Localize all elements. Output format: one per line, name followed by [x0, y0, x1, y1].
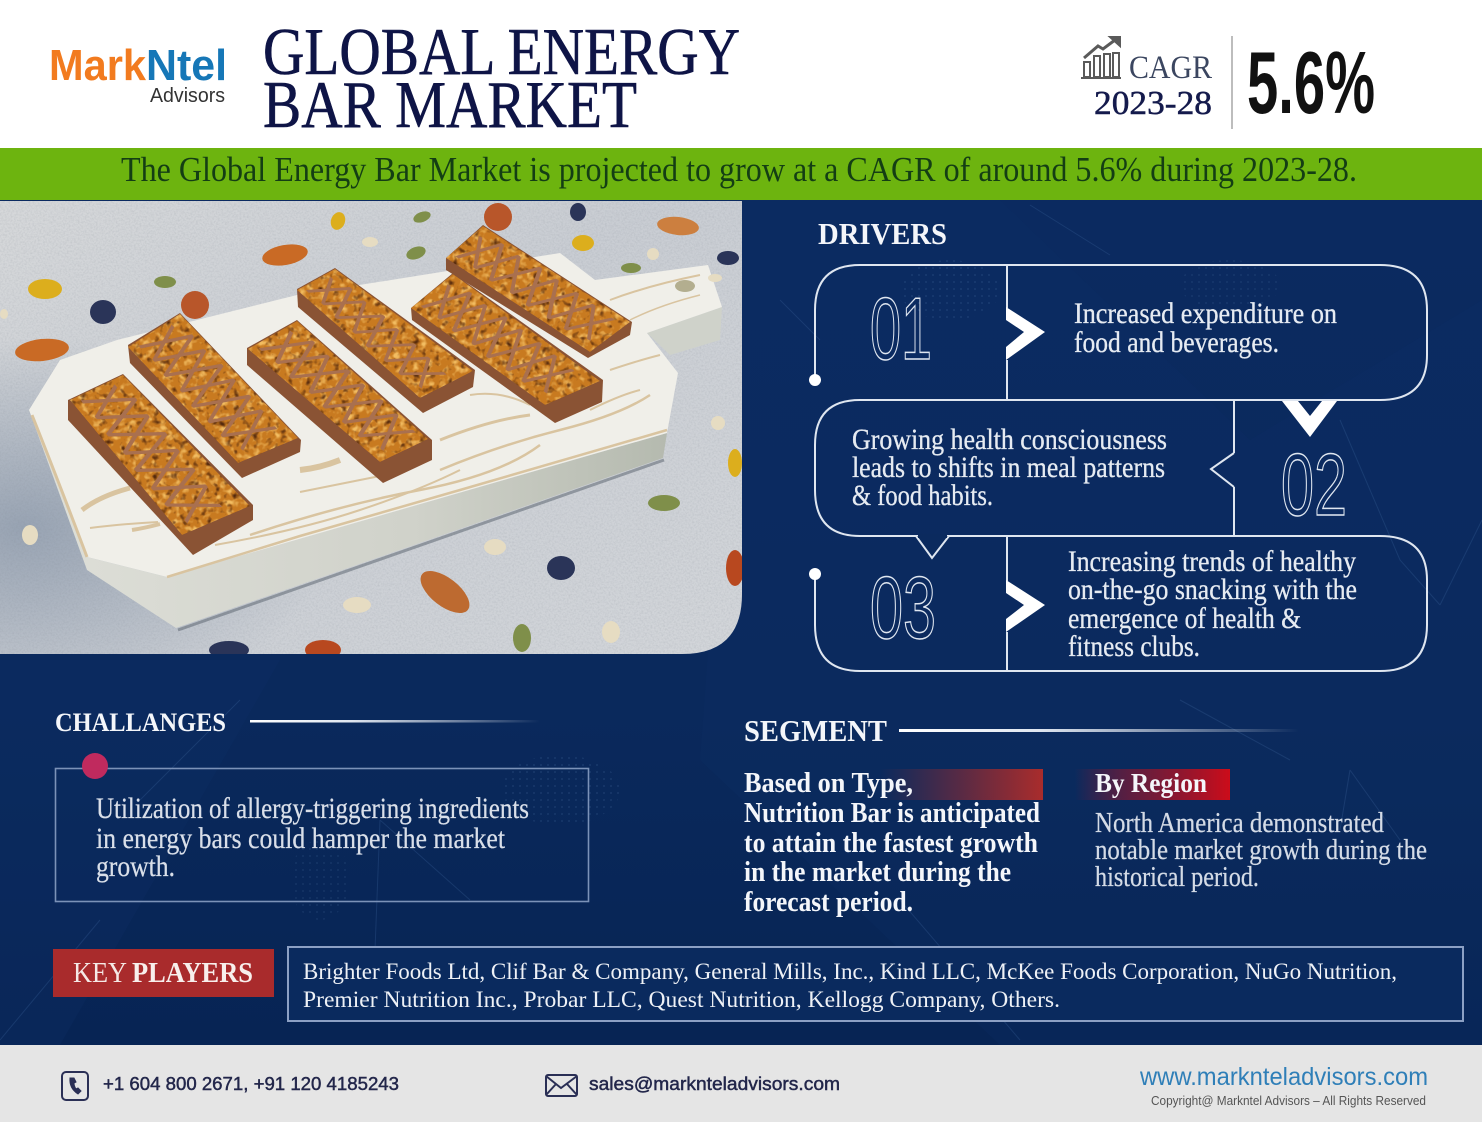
- driver 3 text: Increasing trends of healthy: [1068, 545, 1356, 578]
- photo: energy bars on a wooden board: [0, 201, 744, 660]
- type text: in the market during the: [744, 857, 1011, 888]
- key players label: KEY: [73, 957, 127, 989]
- table surface: [0, 201, 742, 654]
- region text: notable market growth during the: [1095, 834, 1427, 866]
- board shadow: [178, 460, 664, 630]
- panel: drivers flow: [809, 265, 1427, 671]
- challenge text: growth.: [96, 850, 175, 883]
- panel: challenges: [56, 753, 588, 902]
- region text: North America demonstrated: [1095, 807, 1384, 839]
- panel: segment by region: [1075, 768, 1427, 893]
- title: GLOBAL ENERGY: [263, 15, 740, 89]
- heading: challenges: CHALLANGES: [55, 708, 226, 737]
- driver 1 text: [1074, 297, 1337, 359]
- email: sales@marknteladvisors.com: [589, 1074, 840, 1094]
- type text: Nutrition Bar is anticipated: [744, 798, 1040, 829]
- logo: MarkNtel Advisors: Ntel: [146, 41, 227, 90]
- challenge text: [96, 792, 529, 883]
- scattered almonds and hazelnuts: [14, 203, 744, 660]
- heading: segment: [744, 713, 1299, 748]
- logo: MarkNtel Advisors: Mark: [49, 41, 146, 90]
- icon: phone: [62, 1072, 88, 1100]
- key players list: [288, 947, 1463, 1021]
- number 01: 01: [870, 279, 932, 378]
- start dot: [809, 374, 821, 386]
- driver 3 text: emergence of health &: [1068, 602, 1301, 635]
- key players label: [53, 949, 274, 997]
- chevron: step 2 down: [1282, 401, 1337, 437]
- driver 3 text: [1068, 545, 1357, 663]
- navy background panel: [0, 200, 1482, 1045]
- driver 3 text: on-the-go snacking with the: [1068, 573, 1357, 606]
- scattered golden raisins: [28, 210, 742, 477]
- CAGR block: [1081, 33, 1375, 132]
- type text: Based on Type,: [744, 768, 913, 799]
- driver 2 text: [852, 423, 1167, 512]
- energy bar 1: [68, 374, 253, 555]
- driver 1 text: Increased expenditure on: [1074, 297, 1337, 330]
- CAGR value: 5.6%: [1247, 33, 1375, 132]
- driver 2 text: & food habits.: [852, 479, 993, 512]
- key players list: Premier Nutrition Inc., Probar LLC, Quest Nutrition, Kellogg Company, Others.: [303, 987, 1060, 1012]
- driver 2 text: leads to shifts in meal patterns: [852, 451, 1165, 484]
- logo: MarkNtel Advisors: [49, 41, 227, 107]
- heading: drivers: DRIVERS: [818, 216, 947, 251]
- notch: step 2 to 3: [916, 536, 949, 558]
- region text: [1095, 807, 1427, 893]
- phone numbers: +1 604 800 2671, +91 120 4185243: [103, 1074, 399, 1094]
- notch: step 2 left: [1211, 453, 1234, 487]
- challenge text: in energy bars could hamper the market: [96, 822, 506, 855]
- energy bar 3: [247, 320, 432, 483]
- CAGR period: 2023-28: [1094, 85, 1212, 122]
- driver 1 text: food and beverages.: [1074, 326, 1279, 359]
- marker dot: [82, 753, 108, 779]
- flow outline: [815, 265, 1427, 671]
- copyright: Copyright@ Markntel Advisors – All Rights Reserved: [1151, 1094, 1426, 1108]
- type text: to attain the fastest growth: [744, 828, 1038, 859]
- icon: envelope: [546, 1075, 577, 1096]
- energy bar 6: [446, 225, 632, 358]
- energy bar 5: [411, 273, 603, 423]
- scattered raisins: [90, 203, 739, 659]
- number 03: 03: [870, 558, 936, 657]
- panel: segment by type: [744, 768, 1043, 918]
- heading: segment: SEGMENT: [744, 713, 887, 748]
- energy bar 4: [297, 268, 475, 413]
- gradient tag: [880, 769, 1043, 800]
- green summary band: [0, 148, 1482, 200]
- gradient tag: [1075, 769, 1230, 800]
- challenge text: Utilization of allergy-triggering ingredients: [96, 792, 529, 825]
- title: [263, 15, 740, 142]
- region heading: By Region: [1095, 768, 1207, 798]
- driver 2 text: Growing health consciousness: [852, 423, 1167, 456]
- key players label: PLAYERS: [132, 957, 253, 989]
- driver 3 text: fitness clubs.: [1068, 630, 1200, 663]
- type text: [744, 768, 1040, 918]
- key players list: Brighter Foods Ltd, Clif Bar & Company, General Mills, Inc., Kind LLC, McKee Foods Corporation, NuGo Nutrition,: [303, 959, 1397, 984]
- number 02: 02: [1281, 435, 1347, 534]
- logo: MarkNtel Advisors: Advisors: [150, 85, 225, 107]
- energy bar 2: [128, 313, 301, 478]
- icon: growth chart: [1081, 37, 1121, 78]
- wooden board: [29, 253, 722, 628]
- region text: historical period.: [1095, 861, 1259, 893]
- chevron: step 3: [1006, 580, 1045, 632]
- scattered pumpkin seeds: [154, 209, 680, 652]
- green summary band: The Global Energy Bar Market is projected to grow at a CAGR of around 5.6% during 2023-28.: [121, 150, 1357, 189]
- website: www.marknteladvisors.com: [1139, 1063, 1428, 1091]
- scattered oats: [0, 237, 725, 643]
- footer: [0, 1045, 1482, 1125]
- header background: [0, 0, 1482, 148]
- CAGR label: CAGR: [1129, 50, 1212, 86]
- chevron: step 1: [1006, 307, 1045, 360]
- title: BAR MARKET: [263, 68, 637, 142]
- type text: forecast period.: [744, 887, 913, 918]
- end dot: [809, 568, 821, 580]
